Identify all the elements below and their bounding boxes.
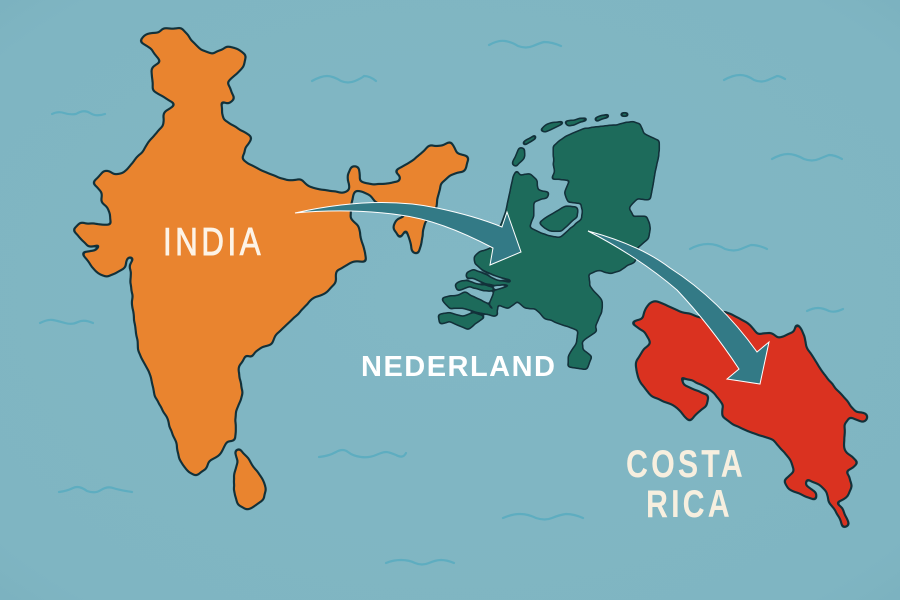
label line: Costa: COSTA [626, 442, 746, 486]
Netherlands mainland [474, 122, 658, 369]
sea waves [40, 41, 843, 565]
India mainland [73, 28, 468, 476]
Costa Rica outline [631, 301, 867, 527]
label: India: INDIA [163, 221, 264, 264]
southwest delta islands [438, 270, 511, 329]
Sri Lanka [234, 449, 266, 510]
Wadden islands [513, 113, 627, 166]
country: India [73, 28, 468, 510]
label: Costa Rica [626, 442, 746, 526]
country: Nederland [438, 113, 658, 369]
Flevoland polder [539, 206, 578, 231]
label: Nederland: NEDERLAND [361, 351, 555, 383]
country: Costa Rica [631, 301, 867, 527]
arrow: India to Nederland [295, 203, 521, 265]
arrow: Nederland to Costa Rica [588, 231, 769, 384]
label line: Rica: RICA [646, 482, 733, 526]
